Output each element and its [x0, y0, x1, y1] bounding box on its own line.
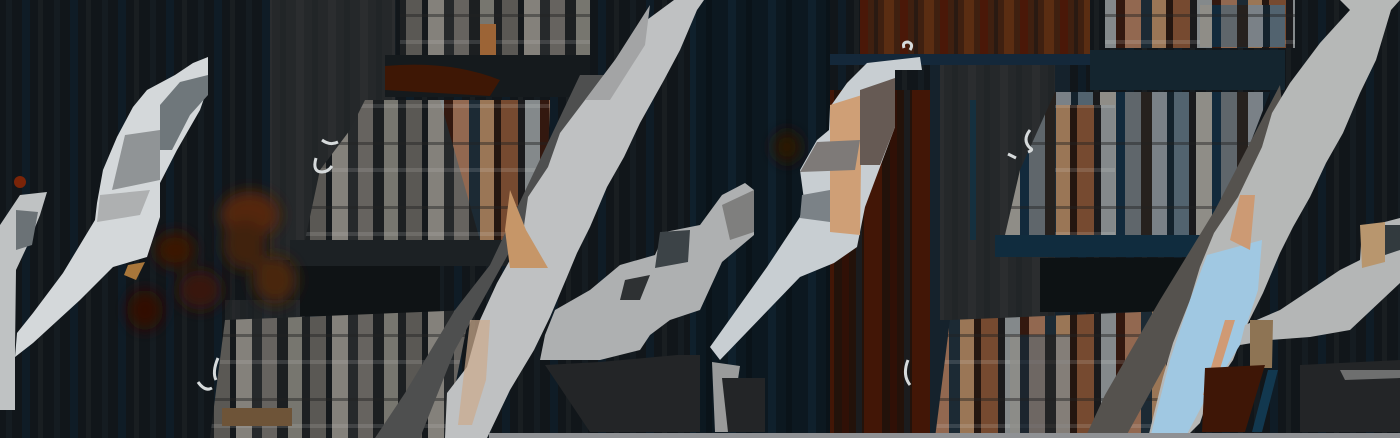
diagonal white pillar: right — [1148, 0, 1400, 438]
diagonal white pillar: left — [445, 0, 704, 438]
marble bust: left edge — [0, 192, 47, 410]
wooden pillars — [225, 0, 1100, 438]
marble bust: reclining figure — [540, 183, 765, 432]
marble bust: first head and robe — [15, 57, 208, 357]
book rows: right bay — [935, 0, 1295, 438]
orange glow figures — [127, 131, 801, 330]
red spot — [14, 176, 26, 188]
marble bust: right figure — [1202, 218, 1400, 432]
small ornaments on pillars — [198, 42, 1032, 389]
wooden struts — [375, 75, 1285, 438]
bottom edge strip — [489, 433, 1400, 438]
book rows: left bay — [210, 0, 590, 438]
marble bust: centre head and robe — [710, 57, 922, 360]
